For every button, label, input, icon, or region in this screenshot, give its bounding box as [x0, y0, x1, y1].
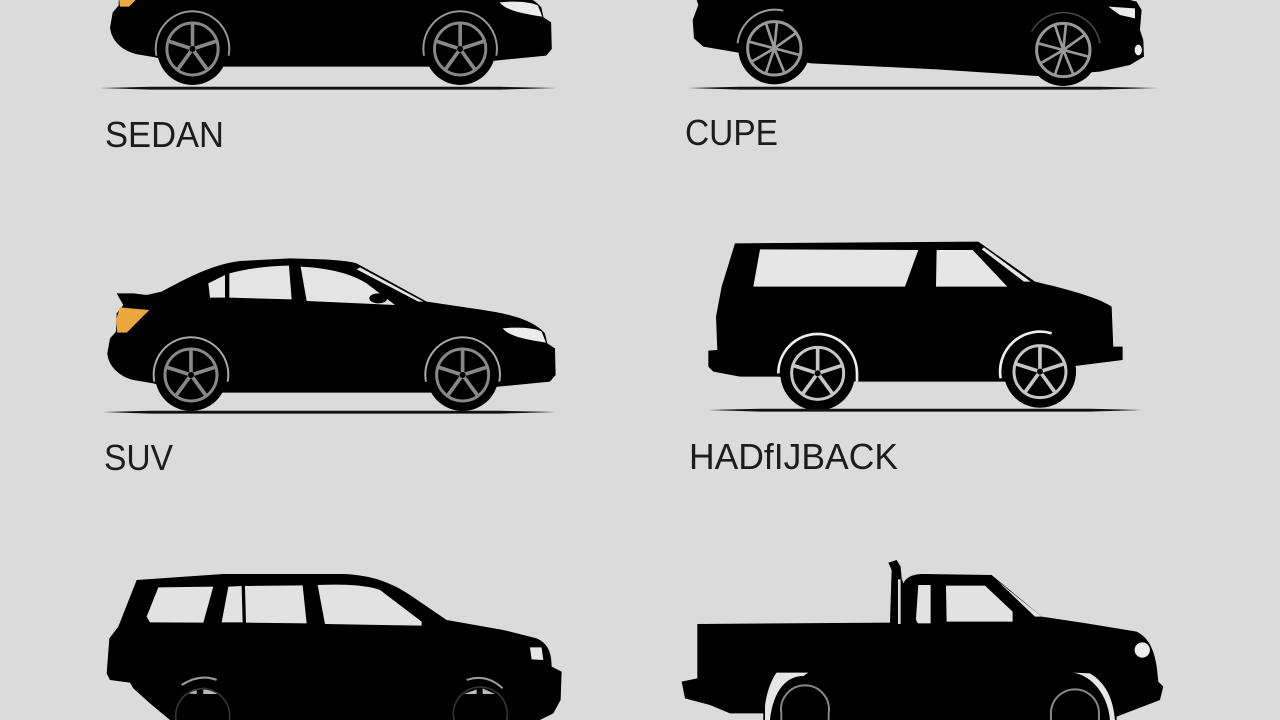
label: hatchback: HADfIJBACK [689, 436, 898, 477]
sedan silhouette [110, 0, 552, 85]
panel: suv label row [103, 258, 556, 478]
wagon silhouette [107, 574, 562, 720]
label: coupe: CUPE [685, 112, 778, 153]
ground line [100, 87, 556, 90]
ground line [688, 87, 1158, 90]
coupe silhouette [693, 0, 1144, 86]
ground line [708, 409, 1142, 412]
panel: suv bottom-left [107, 574, 562, 720]
suv row silhouette [107, 258, 556, 411]
hatchback silhouette [708, 242, 1123, 411]
ground line [103, 411, 556, 414]
panel: sedan [100, 0, 556, 155]
label: sedan: SEDAN [105, 114, 224, 155]
pickup silhouette [682, 560, 1163, 720]
panel: coupe [685, 0, 1158, 153]
panel: pickup [682, 560, 1163, 720]
panel: hatchback [689, 242, 1142, 477]
label: suv: SUV [104, 437, 173, 478]
